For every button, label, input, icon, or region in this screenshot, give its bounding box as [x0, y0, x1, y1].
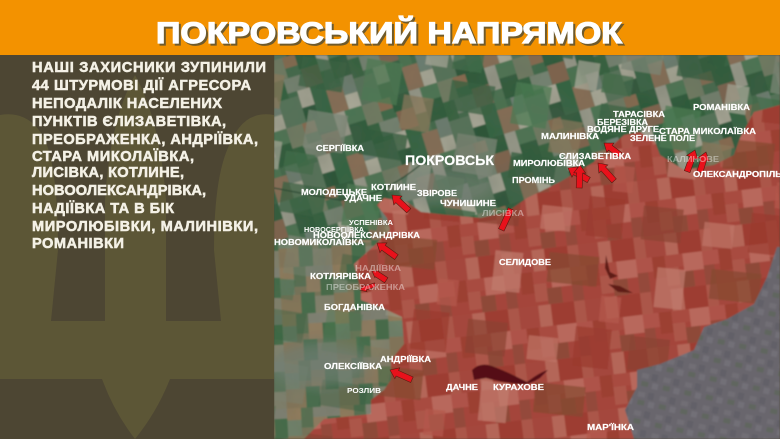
label: Chunyshyne: ЧУНИШИНЕ — [440, 198, 496, 208]
map: urban grey area — [625, 247, 780, 439]
summary text block — [32, 60, 266, 252]
label: Vodiane Druhe: ВОДЯНЕ ДРУГЕ — [587, 124, 659, 134]
arrow: Kalynove west — [684, 150, 698, 173]
arrow: Kotlyne — [392, 194, 412, 214]
summary text block: МИРОЛЮБІВКИ, МАЛИНІВКИ, — [32, 219, 258, 235]
label: Kotliarivka: КОТЛЯРІВКА — [310, 271, 371, 281]
summary text block: ЛИСІВКА, КОТЛИНЕ, — [32, 165, 184, 181]
arrow: Myroliubivka — [568, 166, 591, 183]
label: Nadiivka: НАДІЇВКА — [355, 263, 401, 273]
label: Kurakhove: КУРАХОВЕ — [493, 382, 544, 392]
map: muted south-western farmland — [274, 239, 404, 439]
map: irregular farmland overlay — [274, 55, 780, 240]
map: irregular occupied fields — [304, 105, 780, 439]
summary text block: ПУНКТІВ ЄЛИЗАВЕТІВКА, — [32, 114, 226, 130]
label: Oleksiivka: ОЛЕКСІЇВКА — [324, 361, 382, 371]
map — [270, 55, 780, 439]
arrow: Vodiane Druhe — [604, 142, 622, 158]
label: Novomykolaivka: НОВОМИКОЛАЇВКА — [274, 237, 364, 247]
label: Oleksandropil: ОЛЕКСАНДРОПІЛЬ — [693, 169, 780, 179]
label: Bohdanivka: БОГДАНІВКА — [324, 302, 385, 312]
map: texture noise — [274, 56, 765, 382]
label: Dachne: ДАЧНЕ — [446, 382, 478, 392]
summary text block: ПРЕОБРАЖЕНКА, АНДРІЇВКА, — [32, 131, 258, 148]
arrow: Nadiivka — [372, 270, 388, 284]
label: Serhiivka: СЕРГІЇВКА — [316, 143, 364, 153]
summary text block: 44 ШТУРМОВІ ДІЇ АГРЕСОРА — [32, 77, 251, 94]
map: farmland base — [274, 55, 780, 241]
label: Marinka: МАР'ЇНКА — [587, 422, 634, 432]
label: Zelene Pole: ЗЕЛЕНЕ ПОЛЕ — [630, 133, 695, 143]
label: Lysivka: ЛИСІВКА — [482, 208, 524, 218]
label: Kalynove: КАЛИНОВЕ — [667, 154, 719, 164]
label: Berezivka: БЕРЕЗІВКА — [597, 117, 648, 127]
left panel background — [0, 55, 274, 439]
label: Novooleksandrivka: НОВООЛЕКСАНДРІВКА — [313, 230, 420, 240]
map: dark reservoir — [472, 365, 548, 384]
label: Tarasivka: ТАРАСІВКА — [613, 109, 665, 119]
label: Pokrovsk: ПОКРОВСЬК — [405, 152, 494, 168]
label: Selydove: СЕЛИДОВЕ — [499, 257, 551, 267]
label: Malynivka: МАЛИНІВКА — [541, 131, 599, 141]
label: Rozlyv: РОЗЛИВ — [347, 388, 381, 395]
label: Andriivka: АНДРІЇВКА — [380, 354, 431, 364]
arrow: Lysivka — [499, 208, 514, 231]
trident emblem — [0, 75, 274, 439]
summary text block: НОВООЛЕКСАНДРІВКА, — [32, 183, 206, 199]
label: Molodetske: МОЛОДЕЦЬКЕ — [301, 187, 367, 197]
title: ПОКРОВСЬКИЙ НАПРЯМОК — [156, 16, 623, 50]
header bar — [0, 0, 780, 55]
label: Myroliubivka: МИРОЛЮБІВКА — [513, 158, 585, 168]
label: Novoserhiivka: НОВОСЕРГІЇВКА — [304, 226, 364, 234]
summary text block: НЕПОДАЛІК НАСЕЛЕНИХ — [32, 96, 222, 112]
map: Pokrovsk urban haze — [395, 165, 495, 205]
label: Romanivka: РОМАНІВКА — [693, 102, 750, 112]
summary text block: НАДІЇВКА ТА В БІК — [32, 200, 174, 217]
map: irregular south-western overlay — [274, 240, 402, 439]
arrow: Kalynove east — [696, 152, 710, 174]
map: imagery layers — [270, 55, 780, 439]
map: upper reservoir — [605, 255, 633, 293]
label: Yelyzavetivka: ЄЛИЗАВЕТІВКА — [559, 151, 631, 161]
label: Preobrazhenka: ПРЕОБРАЖЕНКА — [326, 282, 405, 292]
arrow: Andriivka — [390, 368, 414, 383]
label: Stara Mykolaivka: СТАРА МИКОЛАЇВКА — [659, 126, 756, 136]
title shadow: ПОКРОВСЬКИЙ НАПРЯМОК — [158, 18, 625, 52]
label: Uspenivka: УСПЕНІВКА — [349, 220, 393, 227]
label: Zvirove: ЗВІРОВЕ — [417, 188, 457, 198]
map: south-west river valley haze — [270, 343, 370, 387]
label: Udachne: УДАЧНЕ — [344, 193, 382, 203]
label: Promin: ПРОМІНЬ — [512, 175, 555, 185]
map: occupied territory — [304, 105, 780, 439]
summary text block: НАШІ ЗАХИСНИКИ ЗУПИНИЛИ — [32, 60, 266, 76]
arrow: Yelyzavetivka east — [598, 162, 617, 184]
arrow: Yelyzavetivka north — [573, 165, 586, 188]
arrow: Preobrazhenka — [360, 282, 376, 292]
summary text block: РОМАНІВКИ — [32, 236, 124, 252]
summary text block: СТАРА МИКОЛАЇВКА, — [32, 148, 194, 165]
arrow: Novooleksandrivka — [376, 242, 398, 260]
map: western river — [274, 165, 420, 200]
label: Kotlyne: КОТЛИНЕ — [371, 182, 416, 192]
